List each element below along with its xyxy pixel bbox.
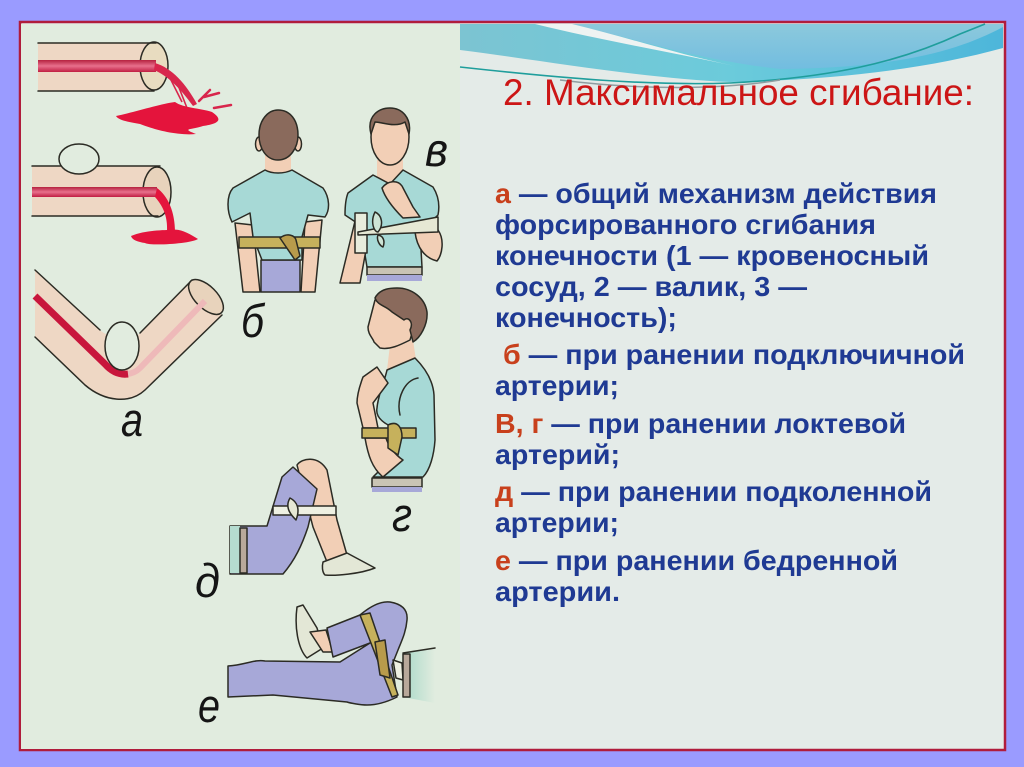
diagram: severed limb with bleeding (38, 42, 231, 134)
diagram: bent limb а (35, 270, 229, 399)
item а: форсированного сгибания (495, 209, 876, 240)
item б (495, 339, 965, 401)
item а: конечности (1 — кровеносный (495, 240, 929, 271)
diagram: limb with roller (32, 144, 198, 244)
label е: е (198, 679, 220, 732)
label д: д (195, 554, 220, 607)
item а: а — общий механизм действия (495, 178, 937, 209)
item а (495, 178, 937, 333)
label б: б (241, 294, 265, 347)
item в, г (495, 408, 906, 470)
item б: артерии; (495, 370, 619, 401)
figure е: hip flexed (228, 602, 435, 705)
text block: legend (495, 178, 965, 607)
item д: артерии; (495, 507, 619, 538)
item е: артерии. (495, 576, 620, 607)
item а: сосуд, 2 — валик, 3 — (495, 271, 808, 302)
item е: е — при ранении бедренной (495, 545, 898, 576)
label г: г (392, 488, 412, 541)
item д: д — при ранении подколенной (495, 476, 932, 507)
illustration panel (21, 24, 460, 749)
item в, г: артерий; (495, 439, 620, 470)
title: 2. Максимальное сгибание: (503, 72, 974, 113)
label а: а (121, 393, 143, 446)
decorative wave header (460, 24, 1003, 88)
figure в: arm bandaged to chest (340, 108, 442, 283)
item в, г: В, г — при ранении локтевой (495, 408, 906, 439)
figure б: belt behind back (228, 110, 329, 292)
label в: в (425, 123, 448, 176)
figure г: elbow flexed (357, 288, 435, 492)
item а: конечность); (495, 302, 677, 333)
item е (495, 545, 898, 607)
item б: б — при ранении подключичной (503, 339, 965, 370)
item д (495, 476, 932, 538)
figure д: knee flexed (230, 459, 375, 575)
